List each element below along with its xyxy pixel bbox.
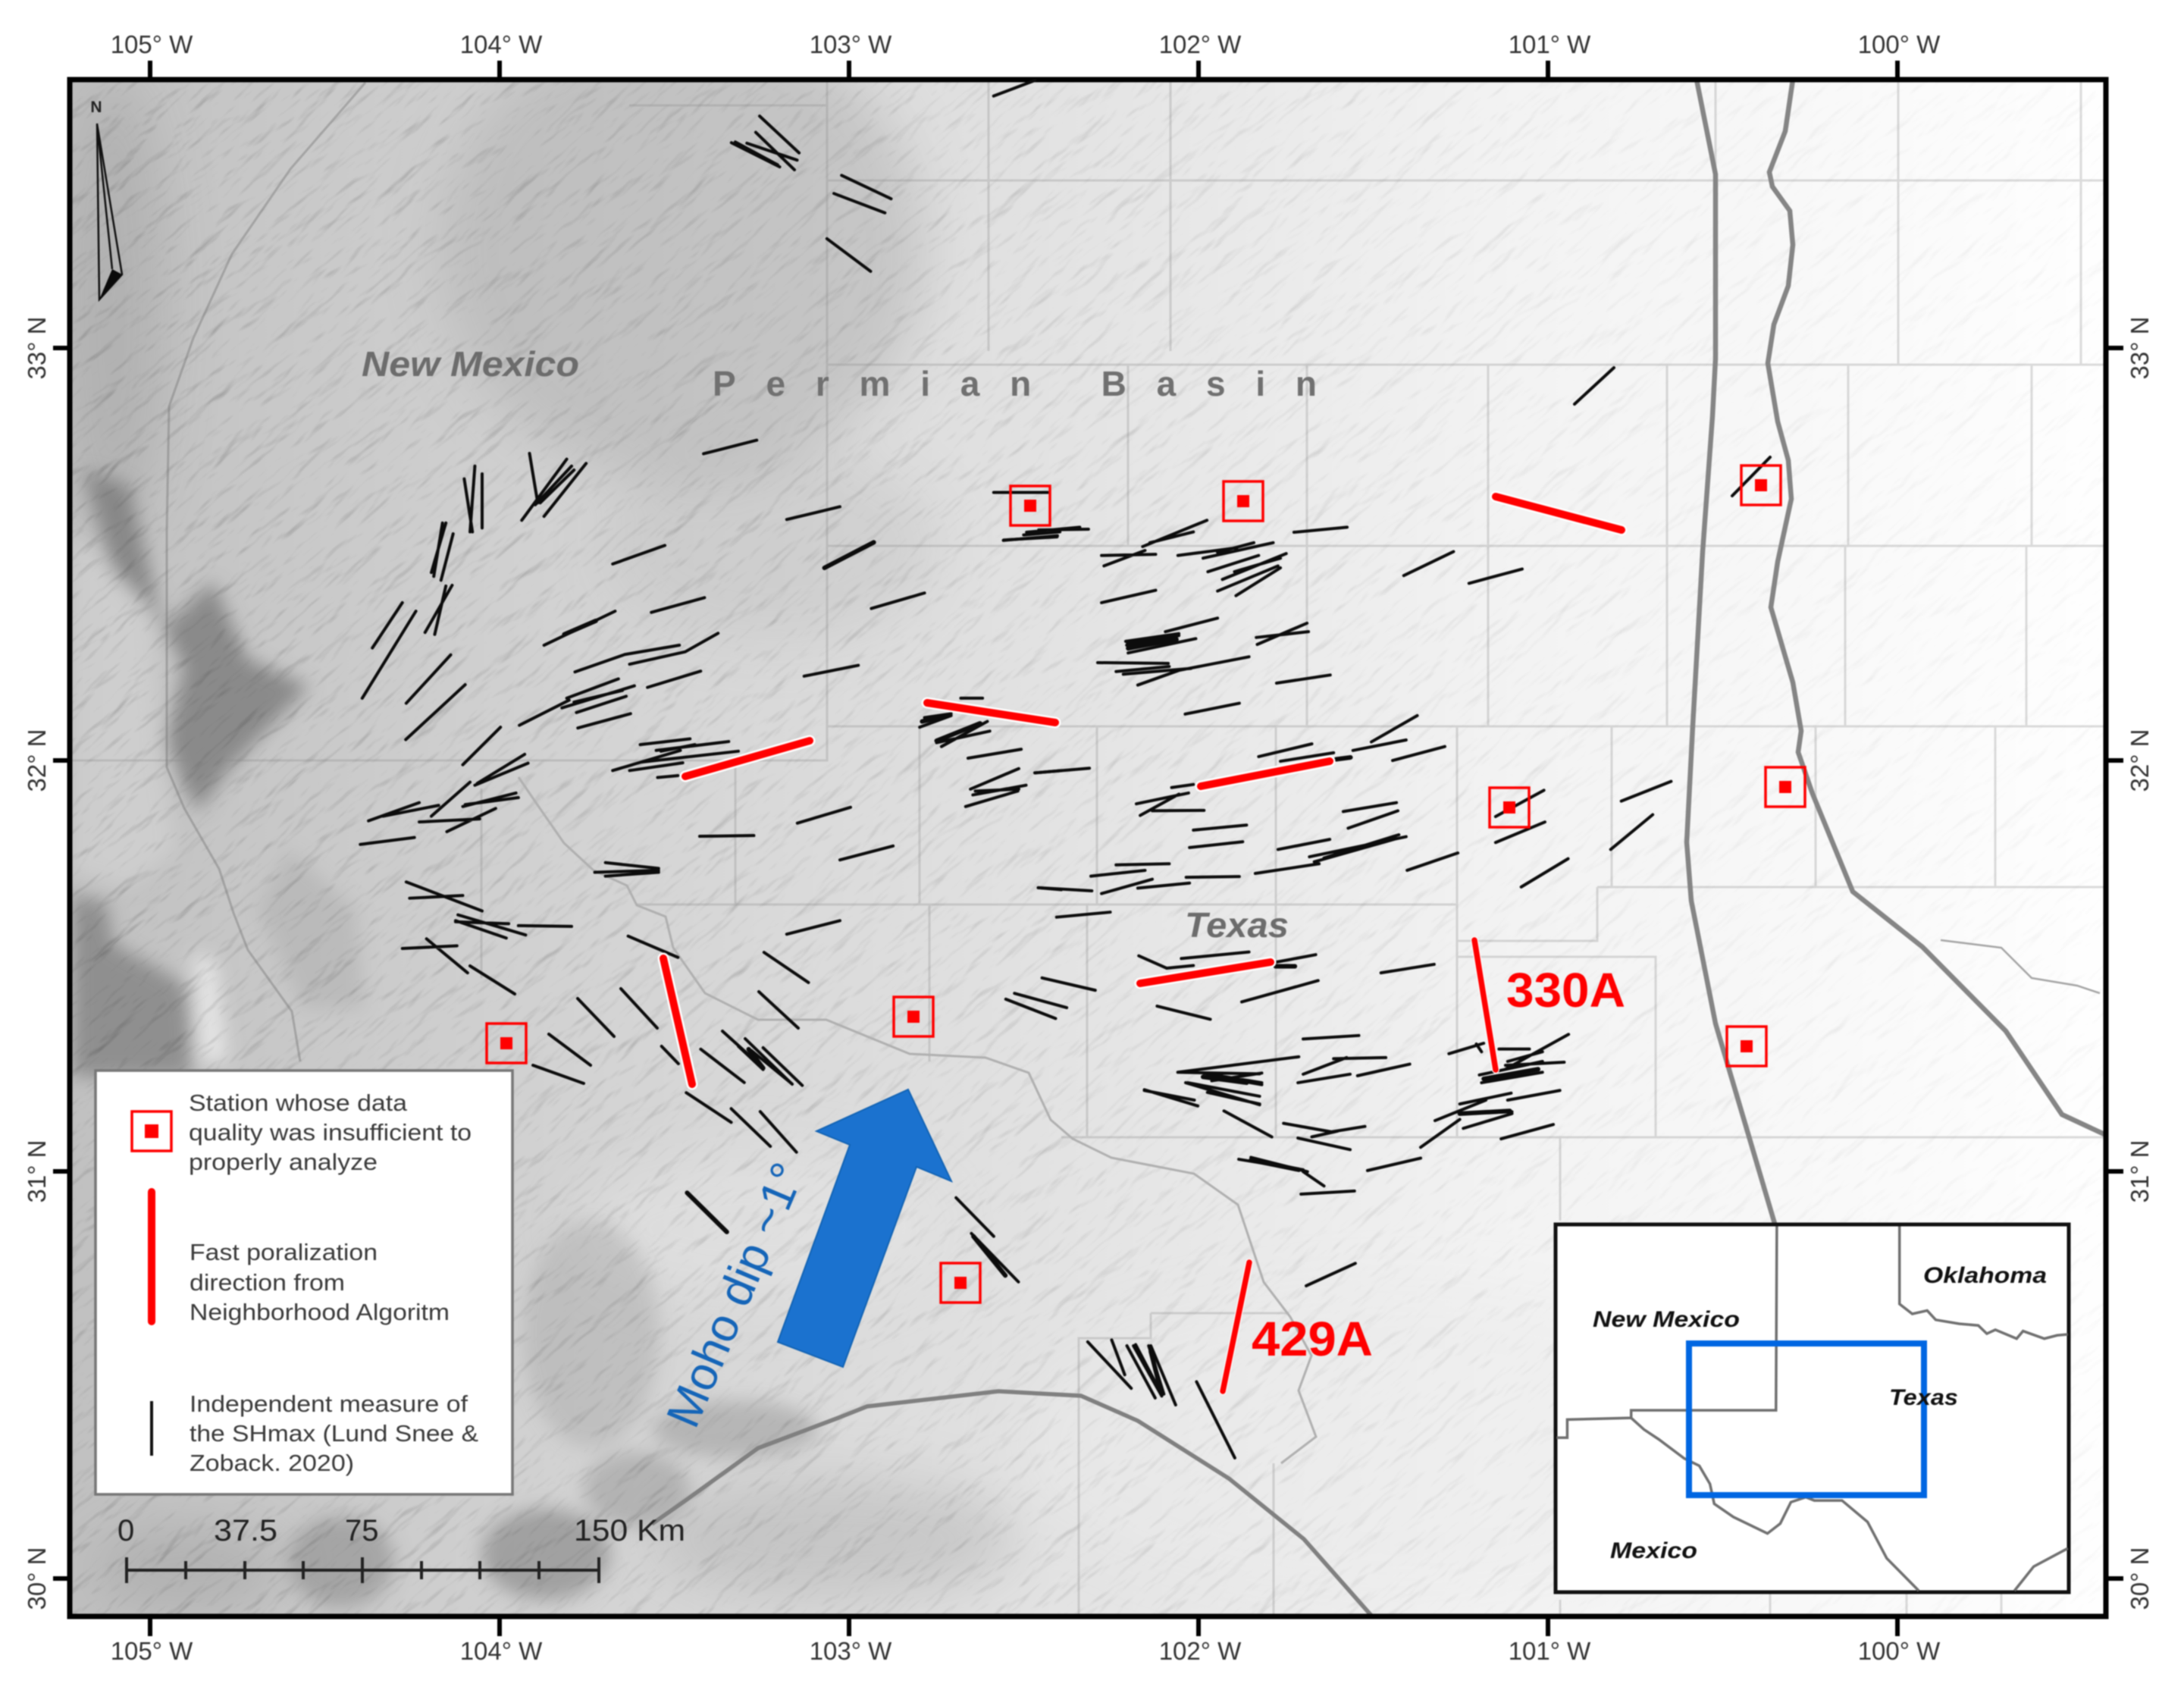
Gray road east 1 bbox=[1687, 80, 1775, 1226]
scale bar: 75 bbox=[345, 1514, 379, 1547]
scale bar bbox=[118, 1514, 685, 1583]
axis ticks and coordinate labels: 104° W bbox=[460, 1637, 543, 1665]
place labels: Permian Basin bbox=[713, 364, 1317, 403]
legend: station symbol and text: properly analyze bbox=[189, 1149, 378, 1175]
thin river east bbox=[1941, 940, 2100, 993]
legend: SHmax symbol and text: Zoback. 2020) bbox=[190, 1450, 354, 1476]
axis ticks and coordinate labels: 31° N bbox=[23, 1140, 51, 1202]
inset locator map bbox=[1556, 1224, 2069, 1592]
axis ticks and coordinate labels: 30° N bbox=[23, 1547, 51, 1610]
axis ticks and coordinate labels: 103° W bbox=[810, 1637, 892, 1665]
axis ticks and coordinate labels: 105° W bbox=[111, 1637, 193, 1665]
legend panel bbox=[96, 1071, 512, 1494]
icon: north arrow bbox=[90, 99, 122, 299]
place labels: New Mexico bbox=[362, 344, 579, 384]
axis ticks and coordinate labels: 105° W bbox=[111, 30, 193, 58]
axis ticks and coordinate labels: 31° N bbox=[2126, 1140, 2154, 1202]
axis ticks and coordinate labels: 101° W bbox=[1509, 1637, 1591, 1665]
text: Moho dip label: Moho dip ~1° bbox=[656, 1155, 815, 1434]
legend: station symbol and text: quality was insufficient to bbox=[189, 1119, 472, 1146]
black SHmax measurement segments bbox=[360, 80, 1770, 1458]
station labels: 429A bbox=[1252, 1312, 1373, 1366]
Rio Grande thin line bbox=[519, 777, 1316, 1463]
legend: fast polarization symbol and text: Neighborhood Algoritm bbox=[190, 1299, 450, 1325]
legend: SHmax symbol and text: Independent measure of bbox=[190, 1390, 468, 1417]
icon: north arrow: N bbox=[90, 99, 102, 116]
legend: SHmax symbol and text: the SHmax (Lund Snee & bbox=[190, 1420, 478, 1447]
place labels bbox=[362, 344, 1317, 945]
axis ticks and coordinate labels: 103° W bbox=[810, 30, 892, 58]
Gray road east 2 bbox=[1768, 80, 2106, 1135]
inset: labels bbox=[1593, 1263, 2047, 1563]
inset: labels: New Mexico bbox=[1593, 1307, 1740, 1332]
gray thin boundary: western road bbox=[167, 83, 365, 1061]
inset: labels: Oklahoma bbox=[1923, 1263, 2047, 1288]
axis ticks and coordinate labels: 100° W bbox=[1858, 30, 1941, 58]
red fast polarization direction lines bbox=[663, 497, 1622, 1391]
inset: labels: Texas bbox=[1889, 1385, 1958, 1410]
legend: fast polarization symbol and text bbox=[152, 1192, 450, 1325]
legend: station symbol and text bbox=[132, 1089, 472, 1175]
axis ticks and coordinate labels: 104° W bbox=[460, 30, 543, 58]
arrow: Moho dip direction bbox=[778, 1089, 951, 1367]
legend: station symbol and text: Station whose data bbox=[189, 1089, 408, 1116]
axis ticks and coordinate labels: 32° N bbox=[2126, 729, 2154, 792]
southern arc road bbox=[652, 1391, 1372, 1616]
scale bar: 37.5 bbox=[214, 1514, 277, 1547]
station labels: 330A bbox=[1506, 963, 1625, 1017]
legend: SHmax symbol and text bbox=[152, 1390, 478, 1476]
legend: fast polarization symbol and text: Fast poralization bbox=[190, 1239, 378, 1265]
axis ticks and coordinate labels: 101° W bbox=[1509, 30, 1591, 58]
axis ticks and coordinate labels: 102° W bbox=[1159, 30, 1242, 58]
inset: labels: Mexico bbox=[1610, 1538, 1697, 1563]
axis ticks and coordinate labels: 32° N bbox=[23, 729, 51, 792]
scale bar: 150 Km bbox=[574, 1514, 685, 1547]
scale bar: 0 bbox=[118, 1514, 134, 1547]
station labels bbox=[1252, 963, 1625, 1366]
legend: fast polarization symbol and text: direction from bbox=[190, 1269, 345, 1296]
axis ticks and coordinate labels: 33° N bbox=[2126, 317, 2154, 379]
axis ticks and coordinate labels: 100° W bbox=[1858, 1637, 1941, 1665]
inset: study area rectangle bbox=[1689, 1343, 1924, 1495]
stations with insufficient data bbox=[487, 466, 1805, 1303]
place labels: Texas bbox=[1185, 905, 1289, 945]
axis ticks and coordinate labels: 102° W bbox=[1159, 1637, 1242, 1665]
inset: state borders bbox=[1556, 1227, 2068, 1591]
axis ticks and coordinate labels: 33° N bbox=[23, 317, 51, 379]
axis ticks and coordinate labels: 30° N bbox=[2126, 1547, 2154, 1610]
